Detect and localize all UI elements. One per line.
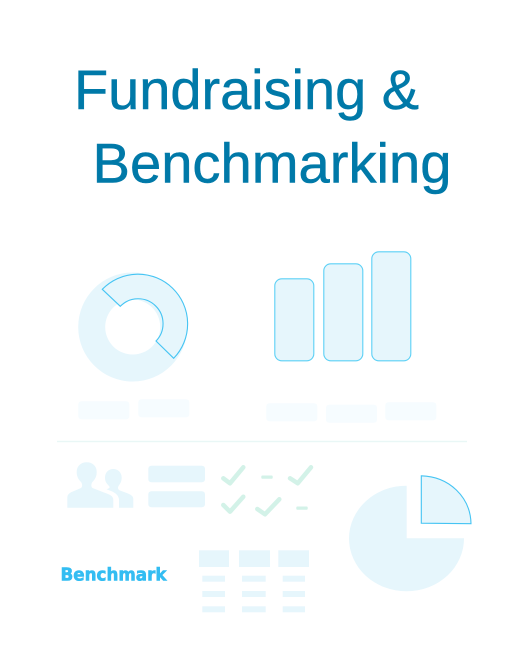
icon: check marks and dashes bbox=[223, 467, 311, 514]
donut legend placeholders bbox=[78, 399, 189, 419]
logo: Benchmark: Benchmark bbox=[60, 566, 167, 586]
table bbox=[199, 550, 309, 612]
text placeholder bars bbox=[148, 466, 205, 507]
pie chart bbox=[349, 476, 471, 591]
icon: people bbox=[67, 462, 133, 508]
title: Fundraising & bbox=[74, 58, 419, 121]
donut chart bbox=[78, 272, 188, 382]
bar legend placeholders bbox=[266, 402, 436, 423]
donut highlighted segment bbox=[102, 274, 188, 358]
title bbox=[74, 58, 452, 195]
title: Benchmarking bbox=[92, 132, 452, 195]
bar chart bbox=[275, 252, 411, 361]
pie highlighted slice bbox=[421, 476, 471, 524]
